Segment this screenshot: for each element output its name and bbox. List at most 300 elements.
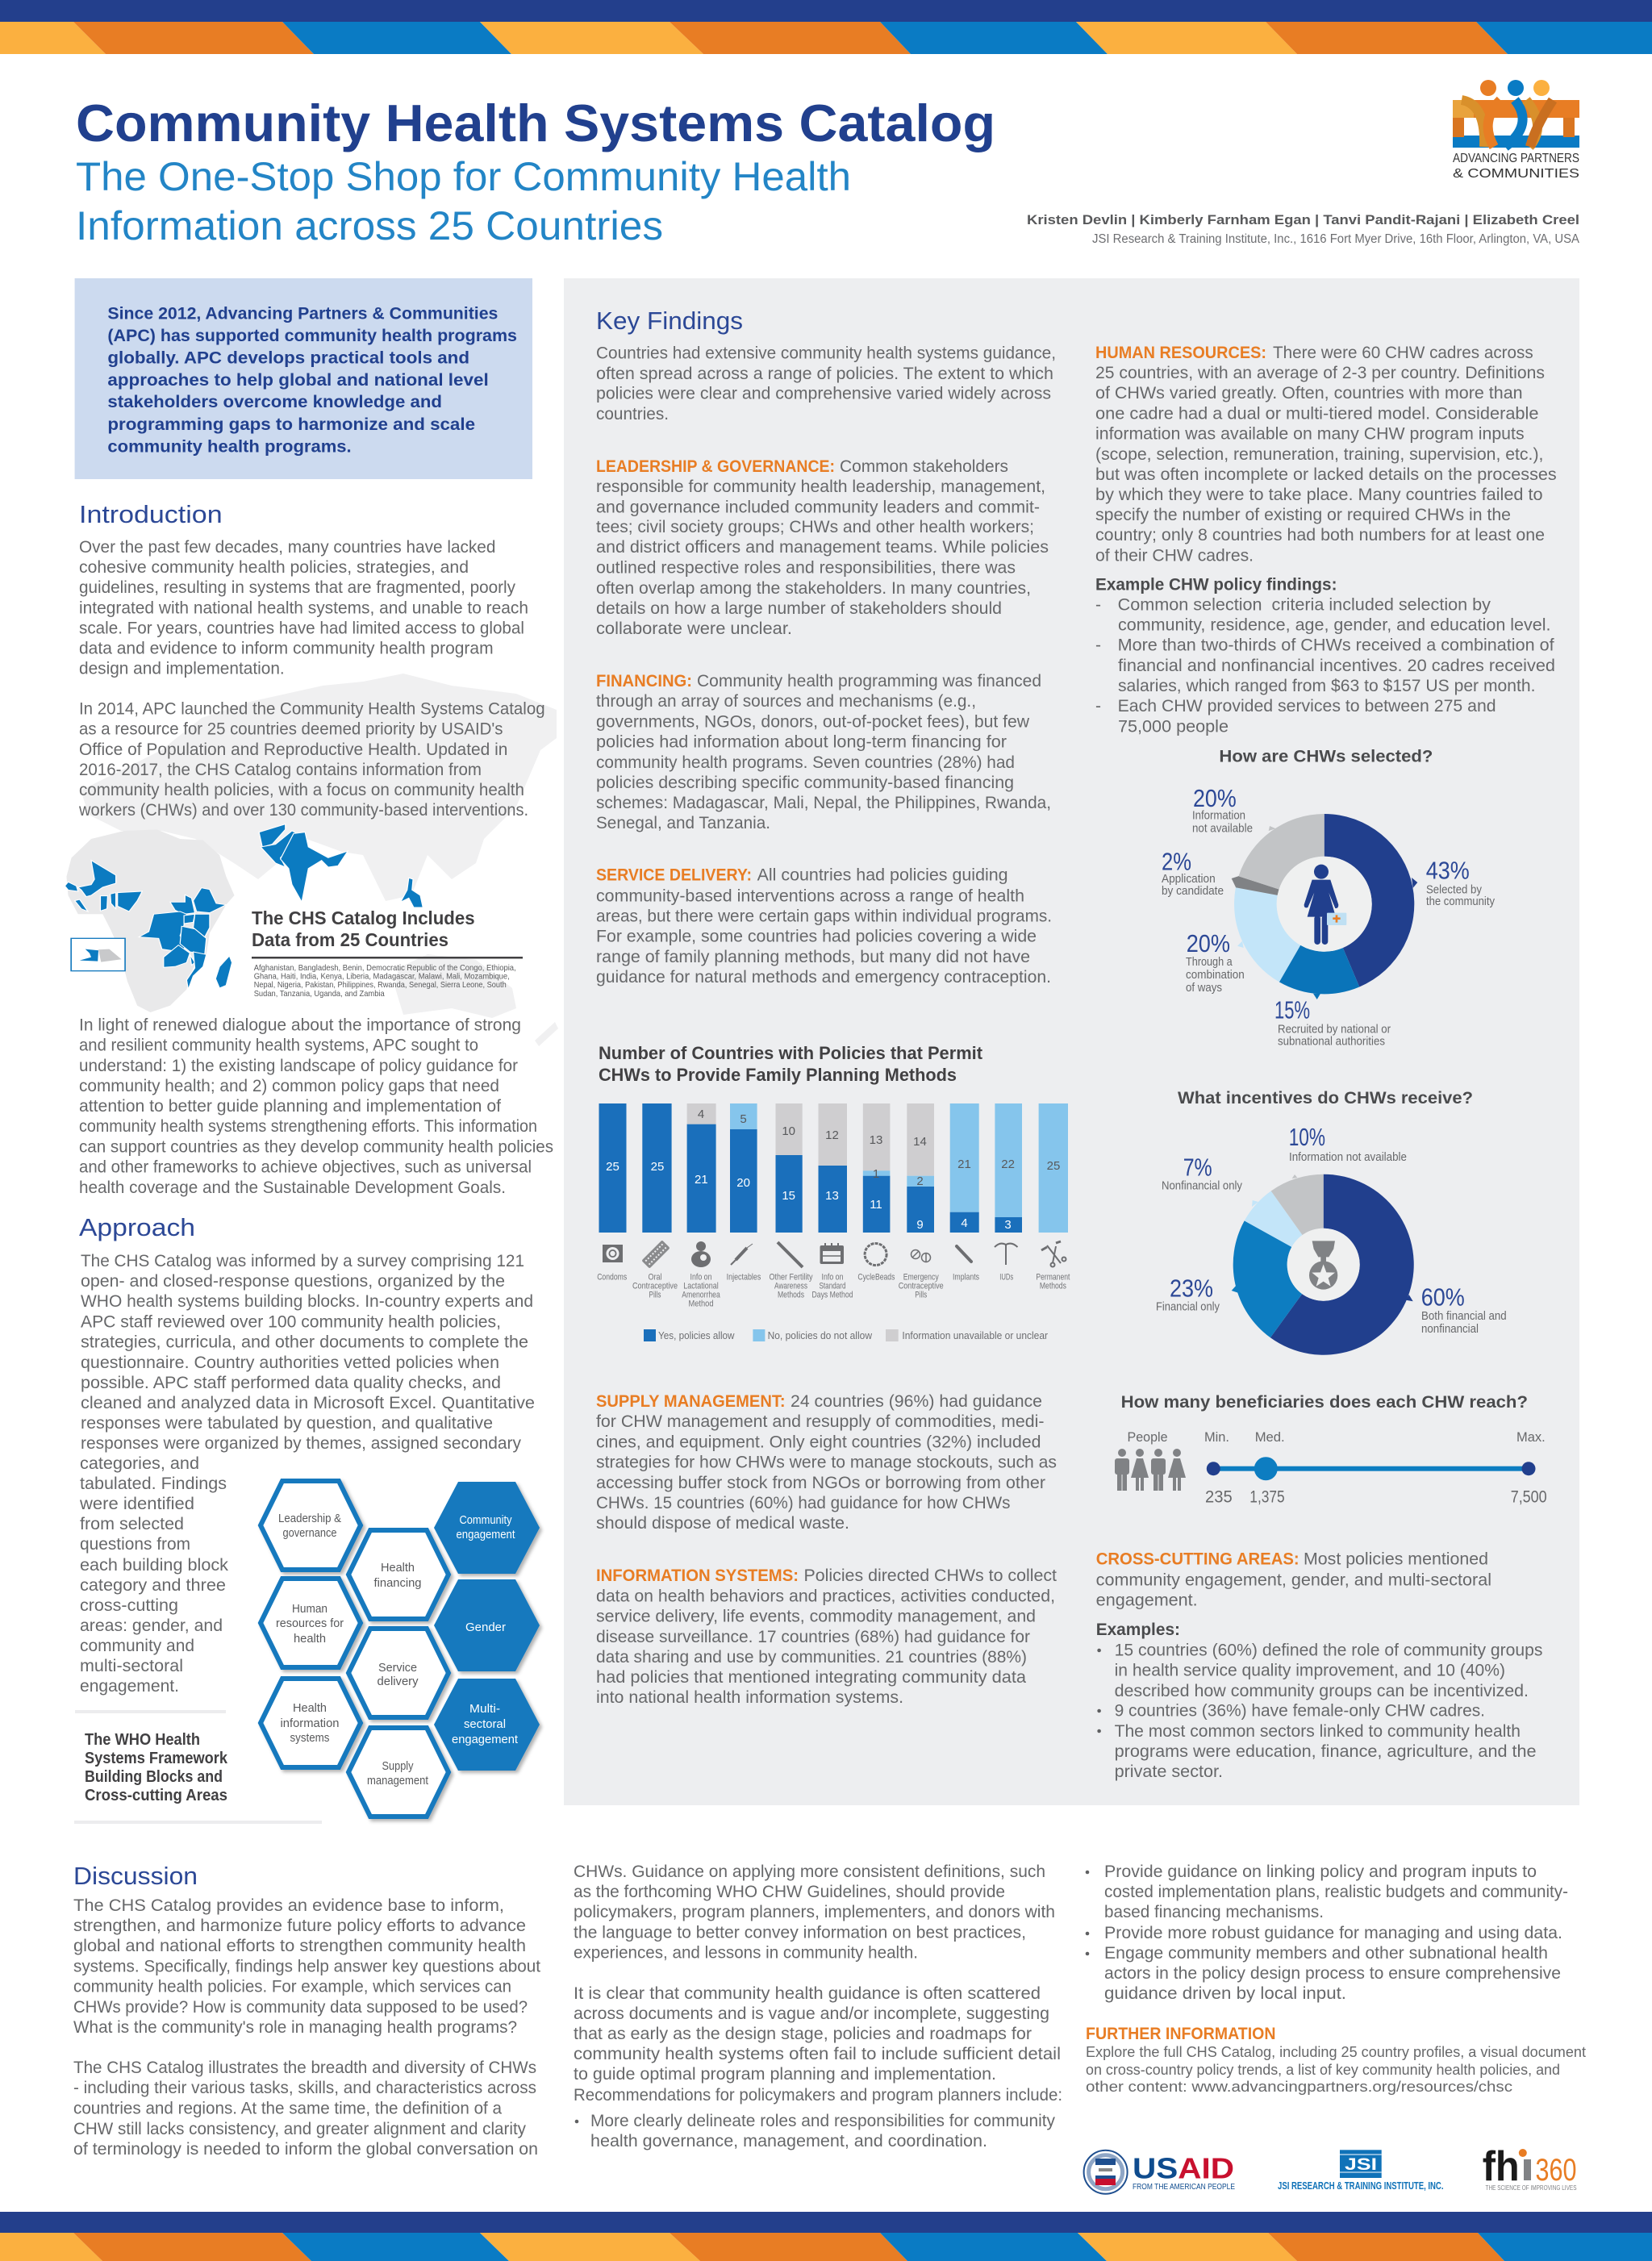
diagram: WHO building blocks hexagons: Leadership & [278,1512,341,1525]
text block: information systems: disease surveillance. 17 countries (68%) had guidance for [596,1628,1030,1646]
text block: service delivery: range of family planning methods, but many did not have [596,948,1030,966]
bar: condoms: 25 [606,1160,620,1174]
text block: approach: responses were tabulated by question, and qualitative [81,1414,493,1433]
text block: introduction: In 2014, APC launched the Community Health Systems Catalog [79,700,545,718]
text block: discussion column 2: across documents and is vague and/or incomplete, suggesting [574,2004,1049,2023]
chart axis labels: Lactational [683,1282,719,1291]
text block: financing [596,672,1051,832]
text block: supply management: 24 countries (96%) had guidance [791,1392,1042,1411]
text block: human resources: HUMAN RESOURCES: [1095,344,1266,362]
text block: discussion column 1: - including their various tasks, skills, and characteristics across [73,2079,536,2097]
donut labels: selection: combination [1186,969,1245,982]
logo: FHI 360: fh [1483,2143,1520,2190]
caption: WHO framework: The WHO Health [85,1731,200,1749]
donut labels: incentives: Information not available [1289,1151,1407,1164]
text block: introduction: integrated with national health systems, and unable to reach [79,599,528,618]
diagram: WHO building blocks hexagons: resources for [276,1616,344,1630]
text block: service delivery: SERVICE DELIVERY: [596,866,752,885]
range chart: beneficiaries per CHW: 235 [1205,1488,1233,1507]
text block: discussion column 3: actors in the policy design process to ensure comprehensive [1104,1964,1561,1983]
text block: further information: Explore the full CHS Catalog, including 25 country profiles, a visual document [1086,2044,1586,2060]
text block: example CHW policy findings: - [1095,636,1101,655]
bar: emergency contraceptive: 9 [916,1218,924,1232]
chart axis labels: Method [689,1299,713,1309]
chart axis labels: Amenorrhea [682,1291,720,1300]
text block: further information: other content: www.advancingpartners.org/resources/chsc [1086,2079,1512,2095]
panel: intro callout: approaches to help global and national level [107,370,489,390]
text block: discussion column 2: policymakers, program planners, implementers, and donors with [574,1903,1055,1921]
bar: condoms [599,1103,626,1233]
text block: introduction continued [79,1016,553,1197]
text block: service delivery: For example, some countries had policies covering a wide [596,927,1037,945]
panel: intro callout: programming gaps to harmonize and scale [107,415,475,434]
logo: USAID: USAID [1133,2152,1234,2185]
text block: supply management: should dispose of medical waste. [596,1514,849,1533]
icon: implant [957,1246,971,1262]
donut labels: selection: 43% [1426,856,1470,884]
text block: approach: strategies, curricula, and other documents to complete the [81,1333,528,1352]
text block: information systems: data sharing and use by communities. 21 countries (88%) [596,1648,1027,1667]
text block: cross-cutting areas: 15 countries (60%) defined the role of community groups [1115,1641,1542,1659]
chart legend: No, policies do not allow [768,1329,873,1341]
text block: cross-cutting areas: community engagement, gender, and multi-sectoral [1096,1571,1491,1589]
text block: discussion column 2 [574,1863,1062,2150]
donut labels: selection: 15% [1274,996,1310,1024]
donut chart: incentives [1232,1174,1414,1355]
diagram: WHO building blocks hexagons: Service [378,1661,417,1675]
bar: lactational amenorrhea: 21 [695,1173,708,1187]
text block: discussion column 2: to guide optimal program planning and implementation. [574,2065,996,2084]
chart axis labels: Awareness [774,1282,807,1291]
text block: approach [79,1252,535,1696]
logo: Advancing Partners & Communities: & COMMUNITIES [1453,167,1579,181]
bar: cyclebeads: 13 [870,1133,882,1147]
bar: lactational amenorrhea: 4 [698,1108,704,1121]
range chart: beneficiaries per CHW: Min. [1204,1429,1229,1445]
logo: JSI [1278,2150,1444,2192]
text block: example CHW policy findings: 75,000 people [1118,718,1229,736]
donut labels: selection: not available [1192,822,1253,835]
text block: discussion column 3: Provide guidance on linking policy and program inputs to [1104,1863,1537,1881]
text block: example CHW policy findings: Example CHW policy findings: [1095,575,1337,594]
range chart: beneficiaries per CHW: People [1128,1429,1168,1445]
text block: leadership and governance: and governance included community leaders and commit- [596,498,1040,516]
icon: calendar [820,1243,844,1264]
text block: introduction: design and implementation. [79,660,285,678]
text block: approach: WHO health systems building blocks. In-country experts and [81,1292,533,1311]
text block: human resources: one cadre had a dual or multi-tiered model. Considerable [1095,405,1539,423]
text block: introduction continued: understand: 1) the existing landscape of policy guidance for [79,1057,518,1075]
world map background [81,674,558,1046]
donut labels: incentives: 23% [1170,1274,1213,1302]
text block: discussion column 1: The CHS Catalog provides an evidence base to inform, [73,1896,504,1915]
text block: discussion column 2: It is clear that community health guidance is often scattered [574,1984,1041,2003]
chart axis labels: Info on [821,1273,844,1283]
donut labels: incentives: Financial only [1156,1300,1220,1313]
donut labels: incentives: Both financial and [1421,1310,1507,1323]
chart legend: Information unavailable or unclear [902,1329,1049,1341]
text block: example CHW policy findings: community, residence, age, gender, and education level. [1118,616,1550,635]
panel: intro callout: (APC) has supported community health programs [107,326,517,345]
chart axis labels: Contraceptive [899,1282,944,1291]
bar: permanent methods: 25 [1047,1159,1060,1173]
bar: IUDs: 22 [1001,1158,1015,1171]
bar: IUDs: 3 [1004,1218,1012,1232]
text block: financing: Community health programming was financed [697,672,1041,690]
text block: introduction continued: attention to better guide planning and implementation of [79,1097,501,1116]
diagram: WHO building blocks hexagons: delivery [378,1675,419,1688]
heading: beneficiaries: How many beneficiaries does each CHW reach? [1121,1393,1528,1412]
chart axis labels: Contraceptive [632,1282,678,1291]
chart legend [644,1329,1049,1341]
text block: leadership and governance: Common stakeholders [840,457,1008,476]
text block: findings summary [596,344,1056,423]
donut labels: selection: 20% [1187,929,1230,957]
text block: financing: through an array of sources and mechanisms (e.g., [596,692,976,711]
text block: introduction continued: and resilient community health systems, APC sought to [79,1037,478,1055]
donut labels: selection: Information [1192,810,1245,823]
bar: other fertility awareness: 10 [782,1124,795,1138]
diagram: WHO building blocks hexagons: Human [292,1602,327,1616]
text block: discussion column 2: More clearly delineate roles and responsibilities for community [590,2112,1055,2130]
text block: human resources: but was often incomplete or lacked details on the processes [1095,465,1557,484]
text block: approach: possible. APC staff performed data quality checks, and [81,1374,501,1392]
text block: discussion column 1: global and national efforts to strengthen community health [73,1937,526,1955]
diagram: WHO building blocks hexagons: financing [374,1576,421,1590]
icon: community health worker [1304,865,1346,945]
chart legend: Yes, policies allow [658,1329,735,1341]
country list: Sudan, Tanzania, Uganda, and Zambia [254,989,385,999]
text block: leadership and governance: LEADERSHIP & GOVERNANCE: [596,457,835,476]
subtitle [76,154,851,248]
diagram: WHO building blocks hexagons: Health [293,1701,327,1715]
text block: supply management [596,1392,1057,1533]
text block: introduction: Office of Population and Reproductive Health. Updated in [79,740,507,759]
icon: emergency pills [912,1250,931,1262]
donut labels: selection: Selected by [1426,883,1483,896]
title: Community Health Systems Catalog [76,94,995,152]
icon: condoms [603,1245,623,1262]
bar: implants: 4 [961,1216,968,1230]
chart axis labels: Permanent [1036,1273,1070,1283]
panel: key findings [564,278,1579,1805]
logo: Advancing Partners & Communities: ADVANCING PARTNERS [1453,152,1579,165]
text block: introduction: 2016-2017, the CHS Catalog contains information from [79,761,482,779]
text block: human resources: of their CHW cadres. [1095,547,1254,565]
text block: financing: schemes: Madagascar, Mali, Nepal, the Philippines, Rwanda, [596,794,1051,812]
icon: cyclebeads [865,1244,886,1265]
text block: cross-cutting areas: engagement. [1096,1591,1198,1610]
text block: leadership and governance: responsible for community health leadership, management, [596,478,1045,496]
text block: human resources: of CHWs varied greatly. Often, countries with more than [1095,384,1523,403]
chart axis labels: Methods [778,1291,804,1300]
chart axis labels: Emergency [903,1273,939,1283]
text block: financing: policies describing specific community-based financing [596,774,1014,792]
bar: oral pills [642,1103,672,1233]
bar: injectables: 5 [740,1112,747,1126]
text block: financing: governments, NGOs, donors, out-of-pocket fees), but few [596,712,1030,731]
text block: financing: community health programs. Seven countries (28%) had [596,753,1015,772]
text block: discussion column 2: the language to better convey information on best practices, [574,1923,1026,1942]
chart axis labels: CycleBeads [857,1273,895,1283]
heading: how are CHWs selected: How are CHWs selected? [1219,747,1433,766]
donut labels: selection: 2% [1162,848,1191,876]
logo: FHI 360: 360 [1536,2153,1576,2188]
text block: introduction: as a resource for 25 countries deemed priority by USAID's [79,720,503,739]
range chart: beneficiaries per CHW: Max. [1516,1429,1546,1445]
diagram: WHO building blocks hexagons: governance [282,1526,337,1540]
text block: supply management: cines, and equipment. Only eight countries (32%) included [596,1433,1041,1452]
bar: emergency contraceptive: 2 [916,1174,924,1188]
diagram: WHO building blocks hexagons: Health [381,1561,415,1575]
donut labels: incentives: nonfinancial [1421,1323,1479,1336]
text block: example CHW policy findings: Common selection criteria included selection by [1118,595,1491,615]
bar: standard days: 12 [825,1128,839,1142]
bar: other fertility awareness: 15 [782,1189,795,1203]
icon: breastfeeding [691,1241,711,1267]
logo: Advancing Partners & Communities [1453,80,1579,181]
icon: thermometer [778,1242,803,1267]
text block: service delivery [596,866,1052,987]
text block: human resources: country; only 8 countries had both numbers for at least one [1095,526,1545,544]
text block: introduction: scale. For years, countries have had limited access to global [79,619,524,638]
heading: Introduction: Introduction [79,500,223,528]
chart axis labels: Pills [649,1291,661,1300]
text block: discussion column 2: experiences, and lessons in community health. [574,1944,918,1963]
text block: leadership and governance: tees; civil society groups; CHWs and other health workers; [596,518,1034,536]
range chart: beneficiaries per CHW [1115,1429,1547,1507]
chart axis labels: Info on [690,1273,711,1283]
country list: Nepal, Nigeria, Pakistan, Philippines, Rwanda, Senegal, Sierra Leone, South [254,980,507,990]
logo: USAID: FROM THE AMERICAN PEOPLE [1133,2182,1235,2192]
text block: cross-cutting areas: The most common sectors linked to community health [1115,1722,1521,1741]
donut chart: CHW selection [1232,814,1417,999]
text block: human resources: by which they were to take place. Many countries failed to [1095,486,1543,504]
diagram: WHO building blocks hexagons: information [281,1717,339,1730]
text block: cross-cutting areas: Most policies mentioned [1304,1550,1488,1569]
text block: financing: Senegal, and Tanzania. [596,814,770,832]
text block: discussion column 2: that as early as the design stage, policies and roadmaps for [574,2025,1032,2043]
text block: approach: areas: gender, and [80,1616,223,1635]
donut labels: selection: the community [1426,895,1496,908]
text block: example CHW policy findings: financial and nonfinancial incentives. 20 cadres received [1118,657,1555,675]
donut labels: selection: Recruited by national or [1278,1024,1391,1037]
chart title: CHWs to Provide Family Planning Methods [599,1065,957,1085]
text block: approach: cleaned and analyzed data in Microsoft Excel. Quantitative [81,1394,535,1412]
text block: cross-cutting areas: programs were education, finance, agriculture, and the [1115,1742,1537,1761]
text block: discussion column 2: health governance, management, and coordination. [590,2132,987,2150]
bar: oral pills: 25 [651,1160,664,1174]
text block: cross-cutting areas: CROSS-CUTTING AREAS: [1096,1550,1299,1569]
donut labels: selection: 20% [1193,784,1237,812]
text block: service delivery: areas, but there were certain gaps within individual programs. [596,907,1052,926]
chart axis labels: Days Method [811,1291,853,1300]
chart axis labels: Pills [915,1291,928,1300]
text block: introduction continued: community health systems strengthening efforts. This information [79,1117,537,1136]
text block: discussion column 1: What is the community's role in managing health programs? [73,2018,517,2037]
chart axis labels: Condoms [597,1273,628,1283]
text block: human resources [1095,344,1557,565]
text block: discussion column 3: Provide more robust guidance for managing and using data. [1104,1924,1562,1942]
text block: service delivery: guidance for natural methods and emergency contraception. [596,968,1051,987]
authors: Kristen Devlin | Kimberly Farnham Egan | Tanvi Pandit-Rajani | Elizabeth Creel [1027,212,1579,227]
country list [254,963,516,999]
text block: supply management: CHWs. 15 countries (60%) had guidance for how CHWs [596,1494,1010,1512]
text block: approach: responses were organized by themes, assigned secondary [81,1434,521,1453]
diagram: WHO building blocks hexagons: Community [460,1513,512,1527]
text block: financing: policies had information about long-term financing for [596,733,1007,752]
text block: cross-cutting areas [1096,1550,1542,1781]
diagram: WHO building blocks hexagons: health [294,1632,326,1646]
text block: cross-cutting areas: described how community groups can be incentivized. [1115,1682,1529,1700]
bar: cyclebeads [863,1103,890,1233]
panel: intro callout [75,278,532,479]
icon: scissors [1041,1241,1066,1266]
text block: approach: open- and closed-response questions, organized by the [81,1272,505,1291]
text block: leadership and governance [596,457,1049,638]
diagram: WHO building blocks hexagons: engagement [452,1733,519,1746]
text block: example CHW policy findings: More than two-thirds of CHWs received a combination of [1118,636,1554,655]
text block: human resources: specify the number of existing or required CHWs in the [1095,506,1511,524]
bar: injectables: 20 [736,1176,750,1190]
diagram: WHO building blocks hexagons: engagement [457,1528,515,1541]
bar: cyclebeads: 11 [870,1198,882,1212]
text block: leadership and governance: outlined respective roles and responsibilities, there was [596,559,1016,578]
text block: discussion column 1 [73,1896,540,2159]
text block: discussion column 1: strengthen, and harmonize future policy efforts to advance [73,1917,526,1935]
text block: approach: categories, and [80,1454,199,1473]
text block: cross-cutting areas: private sector. [1115,1762,1223,1781]
text block: cross-cutting areas: 9 countries (36%) have female-only CHW cadres. [1115,1702,1485,1721]
text block: leadership and governance: and district officers and management teams. While policies [596,538,1049,557]
text block: example CHW policy findings [1095,575,1555,736]
icon: oral pills [641,1240,670,1269]
range chart: beneficiaries per CHW: 1,375 [1249,1488,1285,1507]
diagram: WHO building blocks hexagons: sectoral [464,1717,506,1731]
text block: supply management: accessing buffer stock from NGOs or borrowing from other [596,1474,1045,1492]
map heading: Data from 25 Countries [252,929,448,950]
bar: IUDs [995,1103,1022,1233]
logo: FHI 360: THE SCIENCE OF IMPROVING LIVES [1486,2184,1577,2192]
text block: approach: tabulated. Findings [80,1475,227,1493]
bar: permanent methods [1039,1103,1068,1233]
top banner [0,0,1652,54]
text block: findings summary: countries. [596,405,669,423]
text block: discussion column 3: Engage community members and other subnational health [1104,1944,1548,1963]
diagram: WHO building blocks hexagons: management [367,1774,429,1788]
bar: standard days [818,1103,847,1233]
text block: discussion column 2: community health systems often fail to include sufficient detail [574,2045,1061,2063]
bar: other fertility awareness [776,1103,803,1233]
text block: supply management: strategies for how CHWs were to manage stockouts, such as [596,1454,1057,1472]
donut labels: selection: Through a [1186,956,1233,969]
text block: introduction continued: community health; and 2) common policy gaps that need [79,1077,499,1095]
country list: Ghana, Haiti, India, Kenya, Liberia, Madagascar, Malawi, Mali, Mozambique, [254,971,510,981]
text block: information systems: into national health information systems. [596,1688,903,1707]
text block: introduction continued: In light of renewed dialogue about the importance of strong [79,1016,521,1034]
chart axis labels: Implants [953,1273,979,1283]
logo: USAID [1084,2150,1235,2194]
text block: discussion column 3: based financing mechanisms. [1104,1903,1324,1921]
subtitle: Information across 25 Countries [76,203,663,248]
text block: discussion column 3: guidance driven by local input. [1104,1984,1346,2003]
caption: WHO framework: Systems Framework [85,1750,228,1767]
bar: lactational amenorrhea [687,1103,716,1233]
text block: information systems: INFORMATION SYSTEMS: [596,1566,799,1585]
text block: leadership and governance: often overlap among the stakeholders. In many countries, [596,579,1031,598]
text block: example CHW policy findings: - [1095,697,1101,715]
icon: medal [1309,1241,1337,1290]
text block: findings summary: policies were clear and comprehensive varied widely across [596,385,1051,403]
caption: WHO framework: Cross-cutting Areas [85,1787,227,1804]
text block: information systems: service delivery, life events, commodity management, and [596,1608,1036,1626]
text block: discussion column 3: costed implementation plans, realistic budgets and community- [1104,1883,1568,1901]
bar: standard days: 13 [825,1189,839,1203]
text block: introduction: workers (CHWs) and over 130 community-based interventions. [78,801,528,820]
chart axis labels: Oral [649,1273,661,1283]
heading: Discussion: Discussion [73,1862,198,1890]
text block: discussion column 1: CHW still lacks consistency, and greater alignment and clarity [73,2120,526,2138]
chart title [599,1043,982,1085]
map heading: The CHS Catalog Includes [252,907,475,928]
bar chart: family planning methods [599,1103,1068,1233]
text block: leadership and governance: details on how a large number of stakeholders should [596,599,1002,618]
heading: Key Findings: Key Findings [596,307,743,335]
chart axis labels: Methods [1040,1282,1066,1291]
caption: WHO framework [85,1731,228,1804]
range chart: beneficiaries per CHW: 7,500 [1511,1488,1547,1507]
text block: discussion column 1: countries and regions. At the same time, the definition of a [73,2100,502,2118]
text block: financing: FINANCING: [596,672,692,690]
bar: emergency contraceptive: 14 [913,1135,927,1149]
text block: introduction: Over the past few decades, many countries have lacked [79,538,495,557]
map heading [252,907,475,950]
text block: leadership and governance: collaborate were unclear. [596,619,792,638]
text block: discussion column 2: as the forthcoming WHO CHW Guidelines, should provide [574,1883,1005,1901]
icon: people [1115,1449,1186,1491]
authors [1027,212,1580,246]
text block: cross-cutting areas: Examples: [1096,1621,1180,1639]
text block: approach: questions from [80,1535,190,1554]
text block: information systems [596,1566,1057,1707]
chart axis labels: IUDs [999,1273,1014,1283]
donut labels: selection [1162,784,1496,1049]
donut labels: selection: Application [1162,873,1216,886]
text block: introduction: community health policies, with a focus on community health [79,781,524,799]
text block: approach: community and [80,1637,194,1655]
text block: discussion column 1: CHWs provide? How is community data supposed to be used? [73,1998,528,2017]
text block: example CHW policy findings: salaries, which ranged from $63 to $157 US per month. [1118,677,1536,695]
panel: intro callout: globally. APC develops practical tools and [107,348,469,368]
text block: service delivery: community-based interventions across a range of health [596,887,1024,905]
authors: JSI Research & Training Institute, Inc., 1616 Fort Myer Drive, 16th Floor, Arlington, VA, USA [1092,232,1580,246]
text block: introduction continued: health coverage and the Sustainable Development Goals. [79,1178,506,1197]
text block: introduction: guidelines, resulting in systems that are fragmented, poorly [79,578,515,597]
text block: further information: on cross-country policy trends, a list of key community health policies, and [1086,2062,1560,2078]
donut labels: incentives: Nonfinancial only [1162,1180,1243,1193]
text block: information systems: had policies that mentioned integrating community data [596,1668,1026,1687]
heading: what incentives: What incentives do CHWs receive? [1178,1089,1473,1108]
text block: approach: category and three [80,1576,226,1595]
bar: cyclebeads: 1 [873,1167,879,1181]
diagram: WHO building blocks hexagons [261,1481,540,1817]
text block: human resources: information was available on many CHW program inputs [1095,425,1525,444]
icon: IUD [995,1244,1018,1265]
heading: Approach: Approach [79,1213,195,1241]
diagram: WHO building blocks hexagons: Gender [465,1621,506,1634]
diagram: WHO building blocks hexagons: Supply [382,1759,414,1773]
range chart: beneficiaries per CHW: Med. [1255,1429,1285,1445]
